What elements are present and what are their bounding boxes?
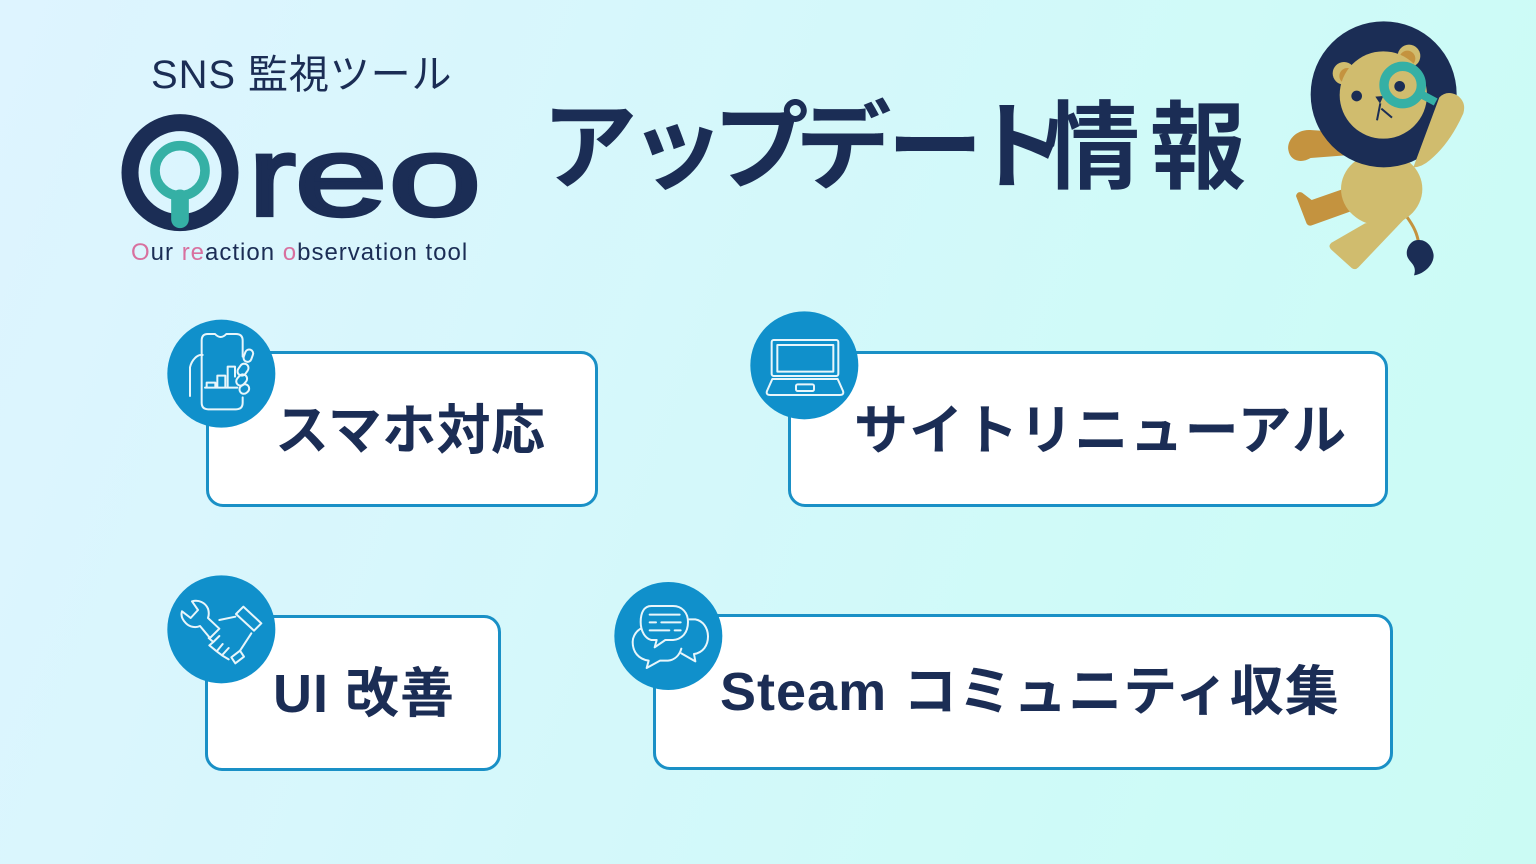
card label: Steam コミュニティ収集	[720, 662, 1340, 722]
logo wordmark: eo	[295, 114, 482, 239]
logo: Oreo SNS monitoring tool	[122, 53, 482, 266]
card label: サイトリニューアル	[854, 401, 1347, 461]
card box	[788, 351, 1388, 507]
panel: site renewal	[750, 311, 1388, 507]
logo caption: SNS 監視ツール	[151, 53, 452, 97]
icon: wrench and hand	[167, 575, 276, 684]
card box	[205, 615, 501, 771]
panel: Steam community collection	[614, 582, 1393, 770]
icon: logo magnifier O	[122, 114, 238, 232]
logo wordmark: r	[249, 114, 297, 239]
logo tagline: Our reaction observation tool	[131, 239, 468, 266]
icon: lion mascot with magnifier	[1288, 21, 1464, 276]
icon: laptop	[750, 311, 858, 420]
icon: hand holding phone	[167, 320, 276, 428]
card box	[653, 614, 1393, 770]
card label: UI 改善	[273, 664, 455, 724]
icon: speech bubbles	[614, 582, 722, 690]
card label: スマホ対応	[275, 401, 545, 461]
card box	[206, 351, 598, 507]
title: アップデート情報	[545, 95, 1246, 202]
panel: smartphone support	[167, 320, 598, 507]
panel: UI improvement	[167, 575, 501, 771]
